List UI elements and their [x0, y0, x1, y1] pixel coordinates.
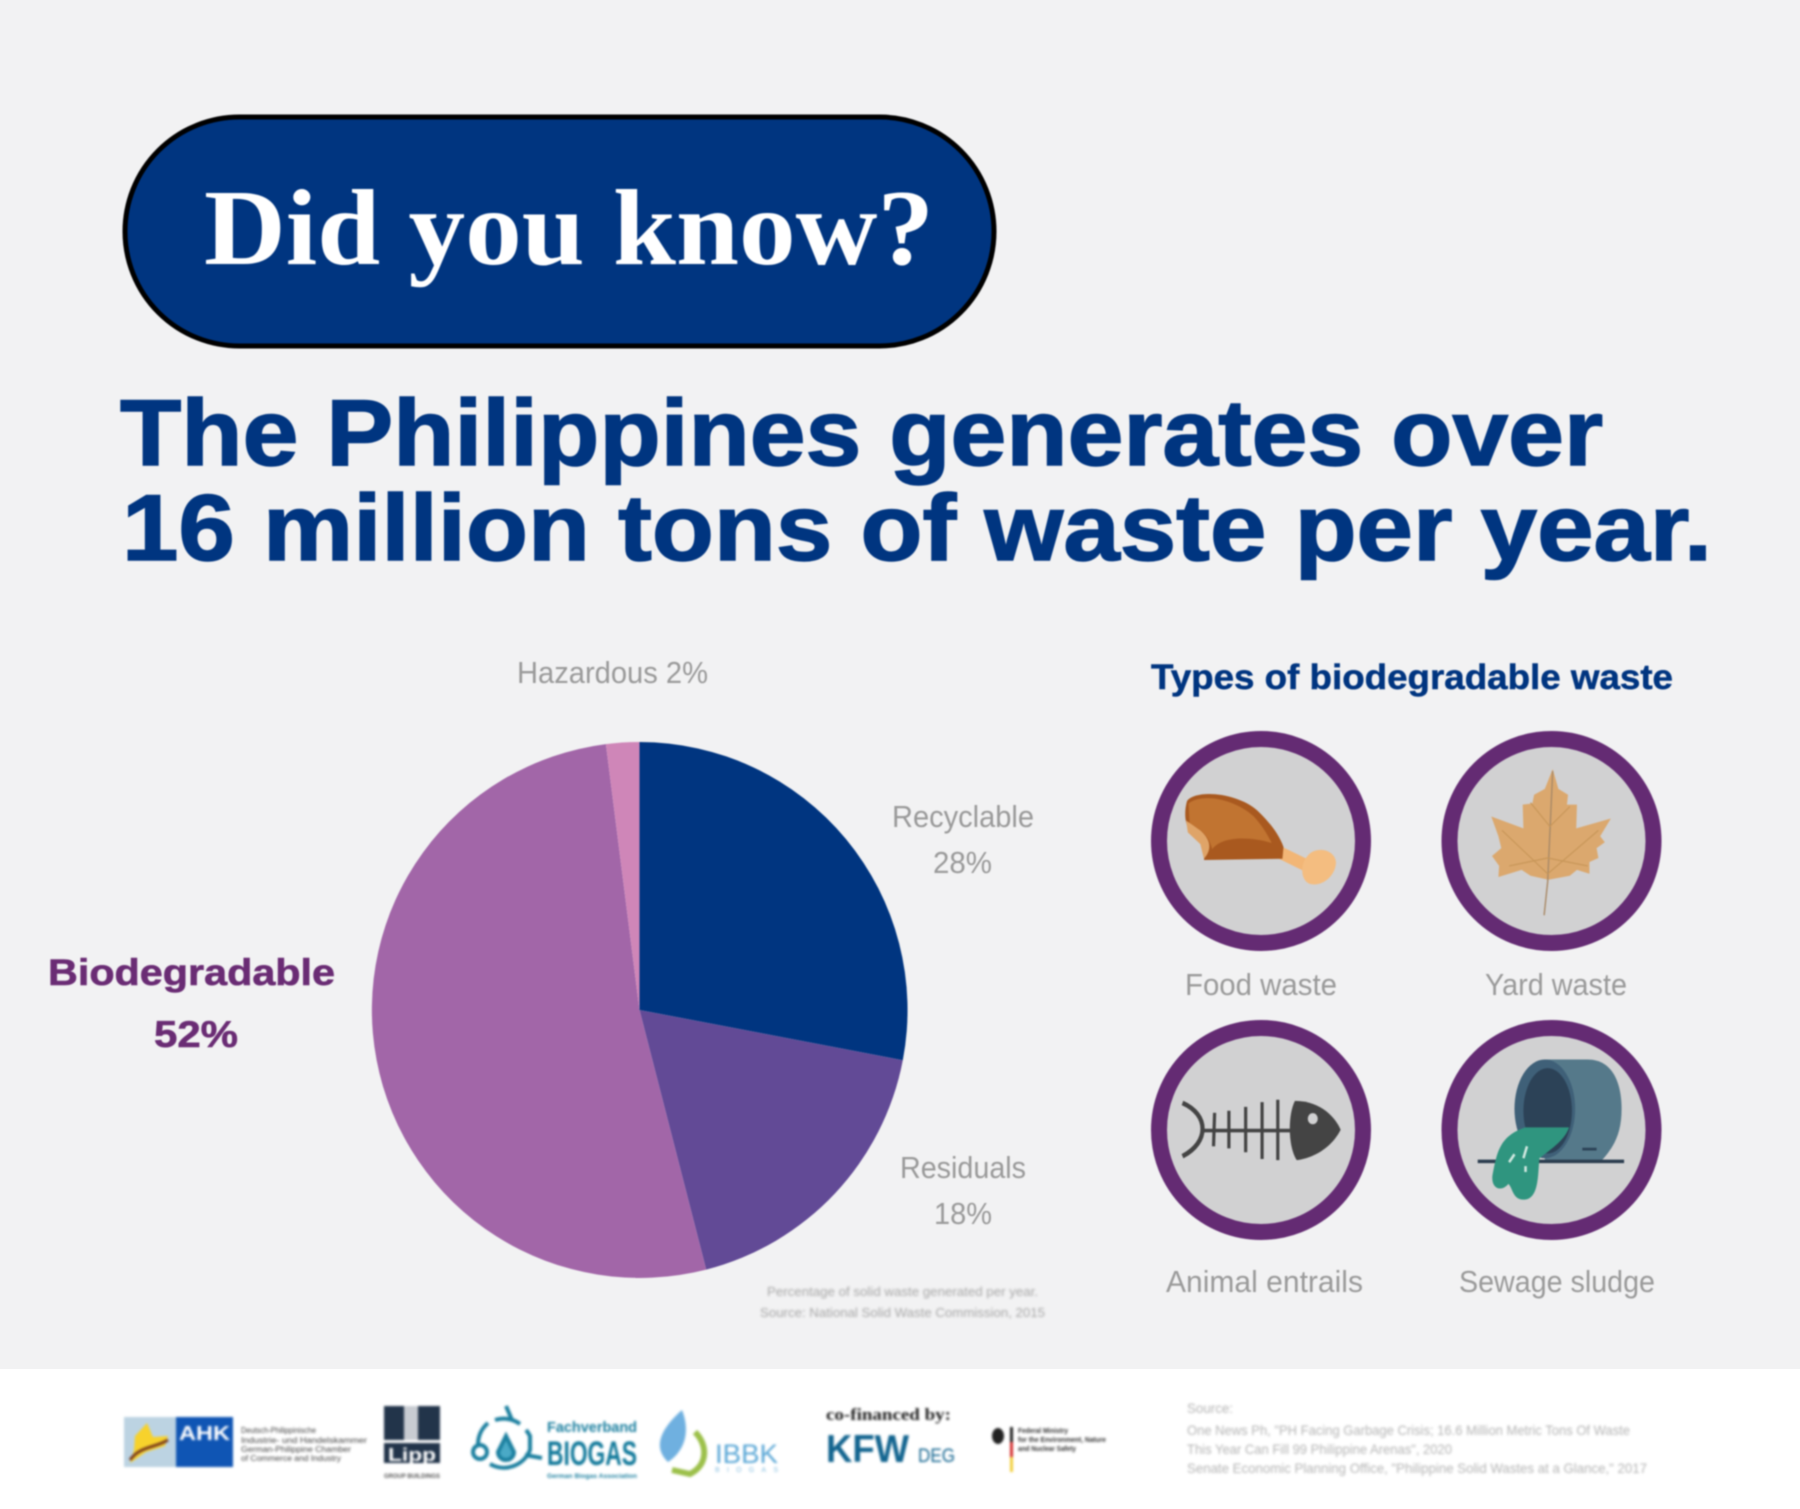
label: yard waste: Yard waste: [1485, 967, 1627, 1002]
ring: food waste: [1159, 739, 1363, 943]
footer sources: Source:: [1187, 1400, 1233, 1416]
heading: types of biodegradable waste: Types of biodegradable waste: [1151, 658, 1673, 697]
pie chart source note: Percentage of solid waste generated per year.: [767, 1284, 1038, 1299]
logo: Fachverband Biogas: German Biogas Association: [547, 1474, 637, 1480]
ring: animal entrails: [1159, 1028, 1363, 1232]
logo: IBBK: BIOGAS: [715, 1467, 778, 1474]
logo: German federal ministry: Federal Ministry: [1018, 1428, 1068, 1435]
icon: fish bone: [1182, 1100, 1341, 1160]
footer band: [0, 1369, 1800, 1509]
pie chart source note: Source: National Solid Waste Commission, 2015: [760, 1305, 1045, 1320]
logo: Lipp: GROUP BUILDINGS: [384, 1474, 440, 1480]
pie label: biodegradable: 52%: [154, 1014, 238, 1055]
ring: yard waste: [1450, 739, 1654, 943]
logo: Lipp: Lipp: [388, 1445, 436, 1465]
logo: Fachverband Biogas: BIOGAS: [547, 1435, 637, 1473]
pie label: hazardous: Hazardous 2%: [517, 655, 708, 690]
logo: co-financed by KFW DEG: co-financed by:: [826, 1405, 951, 1424]
icon: dry leaf: [1491, 769, 1611, 915]
pie chart source note: [760, 1284, 1045, 1320]
title pill: Did you know?: [125, 117, 994, 346]
pie label: recyclable: Recyclable: [892, 799, 1034, 834]
pie label: biodegradable: [48, 952, 335, 1055]
logo: AHK: [124, 1417, 367, 1467]
pie label: residuals: Residuals: [900, 1150, 1026, 1185]
pie chart: solid waste composition: [372, 742, 908, 1278]
label: sewage sludge: Sewage sludge: [1459, 1264, 1655, 1299]
logo: AHK: Deutsch-Philippinische: [241, 1426, 317, 1435]
logo: Fachverband Biogas: Fachverband: [547, 1419, 637, 1436]
logo: IBBK: [660, 1410, 778, 1474]
label: food waste: Food waste: [1185, 967, 1337, 1002]
logo: co-financed by KFW DEG: DEG: [918, 1446, 955, 1467]
footer sources: One News Ph, "PH Facing Garbage Crisis; 16.6 Million Metric Tons Of Waste: [1187, 1422, 1630, 1438]
title pill: Did you know?: Did you know?: [204, 169, 934, 288]
footer sources: This Year Can Fill 99 Philippine Arenas", 2020: [1187, 1441, 1452, 1457]
headline: [120, 380, 1712, 580]
logo: Fachverband Biogas: [473, 1406, 637, 1480]
pie label: biodegradable: Biodegradable: [48, 952, 335, 993]
logo: AHK: AHK: [179, 1423, 231, 1445]
pie label: recyclable: 28%: [933, 845, 992, 880]
footer sources: [1187, 1400, 1647, 1476]
pie label: recyclable: [892, 799, 1034, 880]
headline: The Philippines generates over: [120, 380, 1603, 485]
headline: 16 million tons of waste per year.: [122, 475, 1712, 580]
logo: German federal ministry: [992, 1427, 1106, 1472]
footer sources: Senate Economic Planning Office, "Philippine Solid Wastes at a Glance," 2017: [1187, 1460, 1647, 1476]
logo: German federal ministry: and Nuclear Safety: [1018, 1446, 1076, 1453]
icon: chicken leg: [1185, 794, 1336, 884]
ring: sewage sludge: [1450, 1028, 1654, 1232]
label: animal entrails: Animal entrails: [1166, 1264, 1363, 1299]
logo: IBBK: IBBK: [715, 1439, 778, 1469]
logo: co-financed by KFW DEG: [826, 1405, 955, 1471]
pie label: residuals: 18%: [934, 1196, 992, 1231]
pie label: residuals: [900, 1150, 1026, 1231]
logo: AHK: Industrie- und Handelskammer: [241, 1436, 367, 1445]
icon: sewage pipe: [1478, 1059, 1624, 1200]
logo: German federal ministry: for the Environment, Nature: [1018, 1437, 1106, 1444]
logo: Lipp: [384, 1406, 440, 1480]
logo: AHK: of Commerce and Industry: [241, 1454, 341, 1463]
logo: AHK: German-Philippine Chamber: [241, 1445, 351, 1454]
logo: co-financed by KFW DEG: KFW: [826, 1428, 909, 1471]
